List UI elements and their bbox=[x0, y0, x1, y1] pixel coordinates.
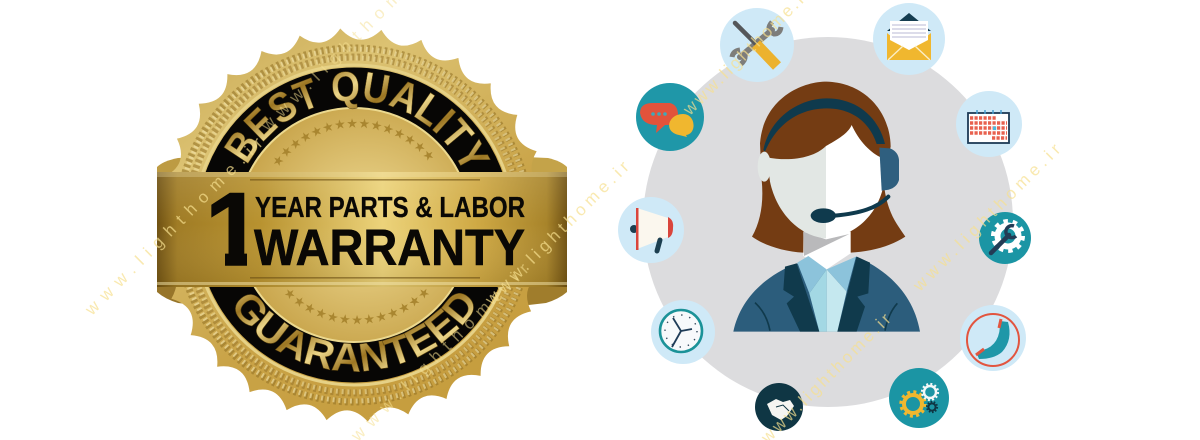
grey backdrop circle bbox=[643, 37, 1013, 407]
stars top: ★★★★★★★★★★★★★★★ bbox=[274, 118, 433, 166]
guaranteed arc text: GUARANTEED bbox=[235, 293, 474, 372]
gold warranty badge bbox=[157, 28, 567, 422]
ear bbox=[758, 152, 771, 182]
icon: chat bubbles bbox=[636, 83, 704, 151]
scalloped seal bbox=[172, 28, 537, 422]
icon: tools bbox=[720, 8, 794, 82]
face left bbox=[767, 146, 826, 238]
headband bbox=[763, 98, 885, 152]
icon: telephone bbox=[960, 305, 1026, 371]
jacket bbox=[733, 257, 920, 332]
centre disc bbox=[237, 108, 471, 342]
shirt and collar bbox=[797, 256, 856, 332]
lapels bbox=[783, 257, 870, 332]
icon: envelope bbox=[873, 3, 945, 75]
icon: handshake bbox=[755, 383, 803, 431]
numeral 1: 1 bbox=[205, 172, 263, 288]
ribbon back curls bbox=[157, 157, 567, 306]
icon: clock bbox=[651, 300, 715, 364]
sleeve creases bbox=[755, 303, 897, 331]
icon: gears bbox=[889, 368, 949, 428]
icon: calendar bbox=[956, 91, 1022, 157]
neck bbox=[803, 232, 851, 269]
watermarks: www.lighthome.ir bbox=[909, 140, 1064, 296]
watermarks: www.lighthome.ir bbox=[347, 259, 533, 440]
icon: wrench in gear bbox=[979, 212, 1031, 264]
hair bbox=[752, 82, 905, 253]
support agent figure bbox=[733, 82, 920, 332]
warranty: WARRANTY bbox=[254, 219, 525, 276]
beaded ring bbox=[177, 48, 531, 402]
watermarks: www.lighthome.ir bbox=[481, 157, 633, 310]
black text ring bbox=[217, 88, 491, 362]
ear cup bbox=[879, 148, 899, 191]
year parts and labor: YEAR PARTS & LABOR bbox=[255, 192, 525, 224]
watermarks: www.lighthome.ir bbox=[81, 133, 267, 320]
microphone bbox=[811, 197, 888, 223]
best quality arc text: BEST QUALITY bbox=[224, 71, 491, 166]
ribbon bbox=[157, 172, 567, 287]
face right bbox=[826, 125, 883, 238]
icon: megaphone bbox=[618, 197, 684, 263]
customer support illustration bbox=[618, 3, 1031, 431]
